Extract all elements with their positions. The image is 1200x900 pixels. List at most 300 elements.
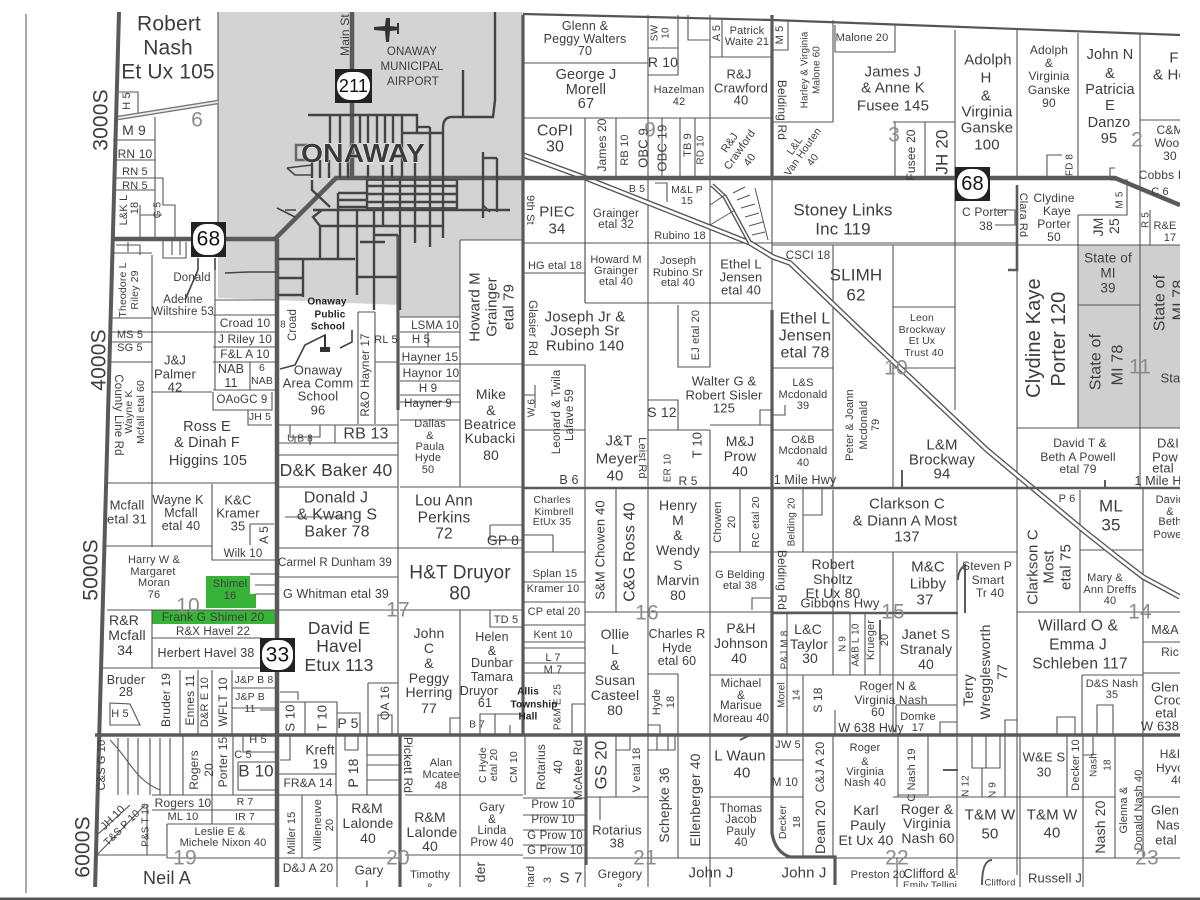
labels: central south parcels: Sholtz: [813, 571, 853, 587]
labels: northeast parcels: & Ho: [1153, 66, 1187, 84]
labels: central south parcels: Susan: [595, 672, 635, 688]
labels: town and central west parcels: 77: [421, 700, 437, 716]
labels: town and central west parcels: D&K Baker 40: [280, 460, 392, 480]
labels: northeast parcels: Adolph: [964, 52, 1012, 68]
labels: central south parcels: GS 20: [592, 741, 610, 789]
labels: southeast parcels: Clifford: [984, 878, 1016, 888]
labels: southwest parcels: H 5: [249, 734, 267, 746]
labels: southwest parcels: FR&A 14: [283, 776, 333, 790]
labels: town and central west parcels: Baker 78: [304, 524, 370, 540]
section numbers: 3: [888, 124, 900, 146]
labels: town and central west parcels: U B 8: [287, 434, 313, 444]
labels: southeast parcels: etal: [1155, 706, 1177, 720]
labels: town and central west parcels: H&T Druyor: [409, 562, 511, 584]
labels: town and central west parcels: Area Comm: [283, 376, 353, 390]
labels: southwest parcels: P 18: [345, 758, 361, 788]
rural drives: [185, 210, 296, 300]
labels: central south parcels: Kimbrell: [534, 506, 574, 518]
labels: central south parcels: L: [611, 641, 619, 657]
labels: central south parcels: Hyde: [662, 641, 692, 655]
labels: central south parcels: C&J A 20: [813, 742, 827, 792]
labels: central south parcels: Morel: [776, 682, 788, 708]
labels: northeast parcels: &: [1105, 66, 1115, 82]
labels: central south parcels: 80: [607, 702, 623, 718]
labels: central south parcels: 40: [551, 760, 565, 774]
labels: central north parcels: Stoney Links: [793, 200, 893, 220]
labels: southwest parcels: [96, 686, 520, 894]
railroad: [118, 102, 1180, 597]
labels: northwest parcels: County Line Rd: [112, 374, 124, 456]
labels: central south parcels: 3: [542, 877, 554, 883]
labels: southeast parcels: & Diann A Most: [853, 512, 958, 530]
labels: central south parcels: CP etal 20: [528, 606, 580, 618]
labels: central south parcels: JW 5: [775, 739, 801, 751]
labels: northwest parcels: Croad 10: [220, 316, 270, 330]
labels: central south parcels: Thomas: [720, 803, 762, 815]
labels: central south parcels: Roger N &: [859, 679, 917, 693]
labels: central north parcels: R&J: [726, 66, 752, 82]
labels: town and central west parcels: Main St: [338, 14, 352, 56]
highway shield 68 east: [955, 167, 990, 201]
labels: southwest parcels: Rogers 10: [155, 796, 212, 810]
labels: northeast parcels: Clydine: [1033, 191, 1075, 205]
labels: town and central west parcels: 80: [449, 584, 471, 604]
labels: town and central west parcels: &: [426, 430, 434, 442]
labels: town and central west parcels: & Kwang S: [297, 506, 377, 524]
labels: northeast parcels: F: [1169, 50, 1179, 66]
labels: southeast parcels: 35: [1106, 689, 1118, 701]
highway shield 68 east: 68: [961, 173, 984, 195]
labels: town and central west parcels: Croad: [287, 309, 299, 341]
labels: southeast parcels: Nash 60: [901, 830, 955, 846]
labels: central south parcels: Charles R: [649, 627, 705, 641]
labels: northeast parcels: etal: [1152, 460, 1174, 476]
labels: central south parcels: L&C: [794, 621, 822, 637]
labels: northwest parcels: MS 5: [117, 329, 143, 341]
labels: central south parcels: EtUx 35: [533, 516, 571, 528]
labels: southeast parcels: ML: [1099, 496, 1123, 516]
labels: central north parcels: etal 40: [661, 277, 695, 289]
labels: central north parcels: OBC 19: [654, 124, 670, 172]
labels: northwest parcels: Ennes 11: [183, 674, 197, 726]
labels: northwest parcels: 35: [231, 518, 245, 534]
labels: northwest parcels: Mcfall etal 60: [135, 380, 147, 444]
labels: central north parcels: R&J: [719, 131, 741, 155]
labels: northeast parcels: Pow: [1152, 450, 1178, 464]
labels: central north parcels: Malone 20: [836, 32, 888, 44]
labels: central north parcels: SW: [650, 24, 660, 41]
left scale labels: 3000S: [90, 89, 112, 151]
labels: town and central west parcels: &: [424, 655, 434, 671]
labels: southwest parcels: Miller 15: [286, 812, 298, 854]
labels: town and central west parcels: Druyor: [460, 684, 498, 698]
labels: central north parcels: B 6: [559, 473, 579, 487]
labels: northeast parcels: State: [1160, 370, 1192, 386]
labels: central north parcels: & Anne K: [861, 80, 925, 96]
labels: southeast parcels: M&C: [911, 558, 945, 576]
labels: northwest parcels: NAB: [251, 375, 273, 387]
labels: northeast parcels: MI 78: [1110, 345, 1126, 385]
labels: northwest parcels: Wayne K: [123, 390, 135, 434]
labels: northwest parcels: 18: [129, 202, 141, 214]
labels: central south parcels: 30: [802, 650, 818, 666]
section numbers: 22: [885, 846, 909, 870]
labels: southwest parcels: Gary: [355, 862, 384, 878]
labels: northwest parcels: Et Ux 105: [121, 60, 215, 84]
labels: central north parcels: Crawford: [722, 128, 758, 172]
labels: southeast parcels: C Nash 19: [906, 748, 918, 802]
labels: town and central west parcels: School: [311, 322, 345, 332]
labels: town and central west parcels: Tamara: [471, 670, 513, 684]
labels: southeast parcels: H&I: [1160, 747, 1180, 761]
labels: central south parcels: Gregory: [598, 867, 642, 881]
labels: northeast parcels: State of: [1084, 250, 1132, 266]
labels: northeast parcels: Fusee 20: [904, 129, 918, 181]
labels: central south parcels: Rotarius: [534, 744, 548, 790]
labels: town and central west parcels: [278, 14, 519, 730]
labels: central north parcels: Ethel L: [780, 310, 830, 328]
labels: central south parcels: C&G Ross 40: [622, 502, 638, 602]
labels: central south parcels: hard: [525, 866, 537, 888]
labels: northeast parcels: [899, 43, 1192, 488]
labels: central north parcels: T 10: [690, 432, 704, 458]
labels: central south parcels: V etal 18: [631, 748, 643, 792]
labels: southeast parcels: Nas: [1156, 818, 1180, 832]
labels: southeast parcels: M&A: [1151, 623, 1179, 637]
labels: northwest parcels: Frank G Shimel 20: [162, 610, 264, 624]
highway shield 68 west: 68: [197, 228, 220, 250]
labels: central north parcels: James J: [865, 64, 921, 80]
labels: northeast parcels: Ganske: [1028, 83, 1070, 97]
labels: central north parcels: Grainger: [593, 208, 639, 220]
labels: central south parcels: Johnson: [714, 635, 768, 651]
labels: southwest parcels: P&S T 10: [140, 803, 152, 847]
labels: southeast parcels: Glenna &: [1118, 786, 1130, 834]
labels: town and central west parcels: Dallas: [414, 418, 446, 430]
labels: central south parcels: Moreau 40: [713, 713, 769, 725]
labels: central south parcels: L Waun: [714, 748, 766, 764]
labels: town and central west parcels: G Whitman etal 39: [283, 587, 389, 601]
labels: northwest parcels: F&L A 10: [220, 347, 270, 361]
labels: northeast parcels: Trust 40: [904, 347, 944, 359]
labels: central north parcels: Crawford: [714, 80, 768, 96]
labels: northwest parcels: Adeline: [163, 294, 203, 306]
labels: southeast parcels: Steven P: [962, 559, 1012, 573]
left scale labels: 6000S: [72, 816, 94, 878]
labels: southeast parcels: Glen: [1151, 802, 1179, 818]
labels: central north parcels: Prow: [724, 448, 757, 464]
labels: town and central west parcels: C: [424, 640, 434, 656]
labels: central south parcels: Charles: [533, 494, 571, 506]
labels: northeast parcels: State of: [1152, 274, 1168, 331]
labels: northeast parcels: 30: [1163, 149, 1177, 163]
labels: southwest parcels: OA 16: [378, 686, 392, 720]
labels: central north parcels: Peter & Joann: [844, 389, 856, 461]
labels: northeast parcels: Porter: [1037, 217, 1071, 231]
labels: northwest parcels: M 9: [122, 122, 146, 138]
labels: town and central west parcels: Hayner 9: [404, 398, 452, 410]
labels: central north parcels: etal 78: [780, 344, 830, 362]
section numbers: 11: [1129, 356, 1151, 378]
labels: central north parcels: 62: [846, 286, 866, 304]
labels: southwest parcels: JH 10: [98, 803, 128, 833]
labels: northeast parcels: Porter 120: [1048, 292, 1070, 386]
highway shield 211: 211: [339, 76, 368, 96]
labels: central north parcels: Grainger: [594, 265, 638, 277]
labels: central south parcels: Rotarius: [592, 822, 642, 838]
labels: southwest parcels: etal 20: [488, 749, 500, 781]
labels: central north parcels: M&J: [726, 433, 754, 449]
labels: northeast parcels: Wooc: [1154, 136, 1186, 150]
labels: town and central west parcels: Onaway: [294, 362, 343, 378]
labels: southwest parcels: T&S P 10: [102, 808, 142, 848]
labels: southeast parcels: T&M W: [1027, 806, 1078, 824]
labels: central south parcels: Marisue: [720, 700, 762, 712]
labels: central north parcels: 40: [606, 468, 624, 484]
labels: northwest parcels: J&P B: [235, 691, 265, 703]
section numbers: 21: [633, 846, 657, 870]
labels: northwest parcels: J&J: [164, 352, 186, 368]
labels: central north parcels: Joseph: [660, 255, 696, 267]
labels: southeast parcels: Tr 40: [976, 586, 1004, 600]
labels: central south parcels: Kent 10: [534, 629, 572, 641]
labels: southeast parcels: 40: [1171, 773, 1185, 787]
labels: central north parcels: 40: [797, 457, 809, 469]
section numbers: 10: [884, 356, 908, 380]
labels: northwest parcels: J Riley 10: [218, 332, 272, 346]
labels: town and central west parcels: 96: [311, 402, 325, 418]
labels: town and central west parcels: &: [488, 644, 497, 658]
labels: northeast parcels: Brockway: [909, 452, 975, 468]
labels: northwest parcels: A 5: [257, 526, 271, 544]
labels: town and central west parcels: 72: [435, 526, 453, 542]
labels: southeast parcels: Roger &: [901, 801, 954, 817]
labels: central south parcels: Gibbons Hwy: [801, 596, 880, 610]
labels: town and central west parcels: School: [298, 388, 338, 404]
labels: central north parcels: Joseph Sr: [551, 322, 619, 340]
labels: central north parcels: EJ etal 20: [690, 310, 702, 360]
labels: southwest parcels: 19: [312, 756, 328, 772]
labels: town and central west parcels: H 9: [419, 383, 437, 395]
labels: southeast parcels: Clarkson C: [869, 496, 945, 512]
labels: central north parcels: Ethel L: [720, 256, 762, 272]
labels: town and central west parcels: 80: [483, 447, 499, 463]
labels: central north parcels: 9th St: [524, 195, 536, 225]
label: township hall: [510, 687, 557, 720]
labels: central north parcels: O&B: [791, 434, 815, 446]
labels: southwest parcels: ML 10: [168, 811, 198, 823]
labels: central north parcels: S 12: [647, 404, 677, 420]
labels: northwest parcels: 6: [259, 362, 265, 374]
labels: town and central west parcels: etal 79: [500, 284, 518, 330]
labels: northeast parcels: Et Ux: [909, 335, 936, 347]
labels: central north parcels: Van Houten: [782, 126, 824, 178]
labels: central north parcels: Lafave 59: [564, 389, 576, 441]
labels: central north parcels: Mcdonald: [779, 389, 827, 401]
labels: central south parcels: [525, 494, 952, 895]
labels: central north parcels: PIEC: [539, 204, 575, 220]
labels: central south parcels: Chowen: [712, 501, 724, 543]
labels: central south parcels: RC etal 20: [750, 496, 762, 548]
labels: central south parcels: etal 60: [658, 654, 696, 668]
labels: central south parcels: Jacob: [725, 814, 757, 826]
labels: northwest parcels: etal 31: [107, 512, 147, 526]
labels: central south parcels: Marvin: [657, 572, 699, 588]
labels: central north parcels: Malone 60: [812, 46, 822, 94]
labels: central north parcels: etal 32: [598, 219, 634, 231]
labels: northwest parcels: Mcfall: [110, 498, 144, 512]
labels: northwest parcels: Kramer: [216, 506, 260, 520]
labels: central south parcels: Belding 20: [786, 497, 798, 546]
labels: northeast parcels: H: [981, 70, 991, 86]
labels: northwest parcels: G 5: [152, 201, 164, 218]
labels: northeast parcels: MI 78: [1170, 280, 1188, 320]
labels: town and central west parcels: RL 5: [374, 334, 398, 346]
labels: northwest parcels: Mcfall: [164, 506, 198, 520]
labels: central south parcels: Ollie: [601, 626, 629, 642]
labels: central north parcels: Patrick: [730, 25, 765, 37]
labels: central north parcels: L&L: [785, 135, 805, 157]
labels: town and central west parcels: 8: [280, 320, 286, 330]
labels: central south parcels: Henry: [659, 497, 697, 513]
labels: northeast parcels: etal 79: [1059, 462, 1097, 476]
labels: central north parcels: 40: [805, 152, 821, 168]
highway shield 33: [260, 638, 295, 672]
labels: northwest parcels: etal 40: [162, 519, 200, 533]
labels: central north parcels: Robert Sisler: [685, 388, 763, 402]
left scale labels: [72, 89, 112, 878]
labels: central south parcels: 40: [734, 837, 748, 849]
labels: central south parcels: S&M Chowen 40: [592, 500, 608, 600]
street grid south of highway: [277, 178, 510, 310]
labels: northeast parcels: Adolph: [1030, 43, 1068, 57]
labels: central south parcels: &: [737, 690, 745, 702]
labels: southeast parcels: 50: [982, 826, 998, 842]
labels: northeast parcels: FD 8: [1064, 154, 1076, 176]
labels: central north parcels: RB 10: [619, 134, 631, 166]
labels: northwest parcels: Nash: [143, 36, 193, 60]
section numbers: 9: [644, 118, 656, 142]
labels: central south parcels: 14: [792, 689, 802, 701]
labels: northwest parcels: Palmer: [154, 366, 197, 382]
left scale labels: 5000S: [80, 539, 102, 601]
labels: southwest parcels: P 5: [337, 715, 359, 731]
labels: central north parcels: Jensen: [720, 270, 762, 284]
labels: central north parcels: Glasier Rd: [526, 300, 538, 356]
labels: southwest parcels: R 7: [237, 796, 253, 808]
section numbers: 19: [173, 846, 197, 870]
labels: northeast parcels: Virginia: [962, 104, 1013, 120]
labels: town and central west parcels: 61: [478, 696, 492, 710]
labels: northwest parcels: D&R E 10: [199, 677, 211, 727]
labels: southwest parcels: Lalonde: [343, 815, 393, 831]
labels: southwest parcels: Michele Nixon 40: [180, 837, 266, 849]
section numbers: 2: [1131, 128, 1143, 152]
labels: central south parcels: Pauly: [726, 826, 756, 838]
labels: northeast parcels: Virginia: [1028, 69, 1070, 83]
labels: central south parcels: G Prow 10: [527, 845, 583, 857]
labels: town and central west parcels: AIRPORT: [387, 76, 439, 88]
labels: town and central west parcels: TD 5: [494, 614, 518, 626]
labels: central south parcels: L 7: [545, 652, 561, 664]
labels: central south parcels: M: [672, 512, 684, 528]
labels: southeast parcels: D&S Nash: [1086, 678, 1138, 690]
labels: central north parcels: B 5: [629, 183, 645, 195]
labels: northeast parcels: 1 Mile H: [1134, 474, 1182, 488]
labels: southeast parcels: Preston 20: [851, 869, 905, 881]
labels: southeast parcels: Beth: [1158, 516, 1182, 528]
labels: town and central west parcels: Onaway: [307, 296, 347, 308]
labels: central north parcels: Inc 119: [815, 220, 871, 238]
labels: southwest parcels: S 10: [282, 704, 298, 732]
labels: northwest parcels: Harry W &: [128, 554, 181, 566]
labels: northwest parcels: 11: [244, 703, 256, 715]
labels: southeast parcels: Nash: [1088, 753, 1100, 777]
labels: town and central west parcels: Hayner 15: [402, 350, 459, 364]
labels: southeast parcels: N 12: [960, 775, 972, 797]
labels: central north parcels: Meyer: [596, 450, 638, 468]
labels: northeast parcels: Clara Rd: [1017, 193, 1029, 237]
labels: central north parcels: CoPI: [537, 122, 573, 140]
labels: central north parcels: Rubino Sr: [653, 267, 703, 279]
labels: southeast parcels: 40: [1044, 824, 1060, 842]
labels: northwest parcels: OAoGC 9: [217, 394, 267, 406]
labels: southwest parcels: C Hyde: [477, 747, 489, 783]
labels: central north parcels: M&L P: [671, 184, 703, 196]
labels: northeast parcels: C 6: [1151, 186, 1169, 198]
labels: town and central west parcels: Beatrice: [464, 416, 516, 432]
labels: southeast parcels: Glen: [1151, 680, 1179, 694]
labels: northwest parcels: Theodore L: [117, 262, 129, 318]
labels: northwest parcels: Herbert Havel 38: [158, 646, 254, 660]
labels: town and central west parcels: H 5: [412, 334, 430, 346]
labels: central south parcels: Michael: [721, 678, 761, 690]
labels: southeast parcels: Virginia: [846, 766, 885, 778]
labels: southwest parcels: Neil A: [143, 868, 191, 888]
labels: southeast parcels: 77: [994, 664, 1010, 680]
labels: southeast parcels: etal: [1155, 832, 1177, 848]
labels: central south parcels: Et Ux 80: [806, 585, 861, 601]
labels: central south parcels: Casteel: [591, 687, 639, 703]
labels: southeast parcels: Terry: [960, 674, 976, 706]
labels: central south parcels: &: [610, 657, 620, 673]
labels: town and central west parcels: Kubacki: [465, 430, 515, 446]
labels: northeast parcels: David T &: [1053, 436, 1107, 450]
section numbers: 20: [386, 846, 410, 870]
labels: central north parcels: etal 40: [721, 282, 761, 298]
green highlighted parcels: [152, 576, 275, 624]
labels: southwest parcels: Alan: [430, 757, 452, 769]
labels: northwest parcels: Wayne K: [152, 493, 204, 507]
labels: northeast parcels: Danzo: [1088, 115, 1130, 131]
labels: northeast parcels: Cobbs I: [1139, 168, 1181, 182]
labels: central south parcels: McAtee Rd: [571, 740, 585, 800]
labels: southwest parcels: der: [472, 861, 488, 882]
labels: southwest parcels: 20: [324, 819, 336, 831]
town name: [294, 143, 425, 163]
labels: central south parcels: Taylor: [790, 636, 828, 652]
labels: southwest parcels: &: [488, 814, 496, 826]
labels: town and central west parcels: John: [414, 625, 444, 641]
labels: southwest parcels: L: [365, 878, 373, 892]
labels: southwest parcels: Linda: [478, 825, 507, 837]
labels: central north parcels: Jensen: [779, 328, 831, 344]
labels: town and central west parcels: Lou Ann: [415, 492, 473, 510]
labels: central south parcels: Janet S: [902, 626, 950, 642]
labels: northeast parcels: &: [1045, 56, 1053, 70]
labels: northeast parcels: JM: [1090, 218, 1106, 236]
labels: central north parcels: Peggy Walters: [544, 32, 626, 46]
